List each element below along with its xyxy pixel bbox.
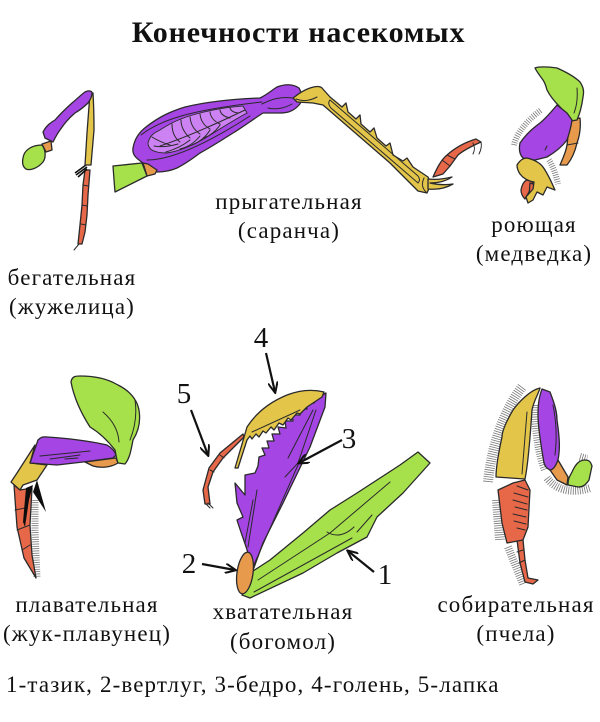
burrowing leg: coxa <box>535 67 584 121</box>
collecting leg: tibia red segment <box>498 480 530 543</box>
label: burrowing: (медведка) <box>476 241 592 266</box>
swimming leg: hairs <box>35 500 37 578</box>
label: running: (жужелица) <box>9 294 135 319</box>
label: swimming: плавательная <box>15 592 159 617</box>
label: burrowing: роющая <box>491 212 577 237</box>
collecting leg: tarsus <box>517 540 538 584</box>
collecting leg: yellow tibia <box>496 388 540 479</box>
running leg illustration <box>23 91 94 250</box>
swimming leg: femur <box>30 437 116 465</box>
burrowing leg illustration <box>514 67 584 203</box>
collecting leg: femur <box>538 389 559 470</box>
number 3: 3 <box>342 423 356 455</box>
arrow 2 <box>202 564 235 570</box>
jumping leg: claws <box>428 177 453 189</box>
grasping leg illustration <box>203 390 430 598</box>
label: collecting: собирательная <box>437 592 595 617</box>
collecting leg: trochanter <box>550 460 568 485</box>
running leg: trochanter <box>42 141 52 152</box>
jumping leg: tarsus <box>433 139 481 177</box>
number 1: 1 <box>378 559 392 591</box>
number 4: 4 <box>254 322 269 354</box>
jumping leg: trochanter <box>143 163 157 176</box>
collecting leg: hairs <box>488 387 546 540</box>
running leg: coxa <box>23 145 45 170</box>
labels <box>3 189 595 654</box>
burrowing leg: hairs <box>514 110 558 184</box>
grasping leg: tarsus <box>203 434 244 504</box>
grasping leg: femur <box>235 393 326 573</box>
number 5: 5 <box>177 378 191 410</box>
label: running: бегательная <box>8 265 136 290</box>
grasping leg: tibia <box>235 390 324 468</box>
label: jumping: (саранча) <box>238 218 340 243</box>
swimming leg: spurs <box>23 480 46 527</box>
burrowing leg: claws <box>521 180 533 199</box>
arrow 4 <box>266 353 275 392</box>
swimming leg illustration <box>11 376 140 578</box>
grasping leg: trochanter <box>234 551 256 595</box>
running leg: tibia <box>85 93 94 165</box>
arrow 5 <box>191 410 208 455</box>
arrow 3 <box>299 440 342 463</box>
burrowing leg: tibia <box>560 118 580 165</box>
swimming leg: tarsus <box>14 485 36 578</box>
jumping leg: coxa <box>113 163 147 192</box>
jumping leg: femur pattern <box>148 106 247 153</box>
jumping leg: femur <box>133 85 302 172</box>
label: jumping: прыгательная <box>215 189 363 214</box>
number 2: 2 <box>182 548 196 580</box>
grasping leg: coxa <box>242 452 430 598</box>
burrowing leg: tarsus <box>517 158 555 203</box>
running leg: spurs <box>75 165 87 177</box>
collecting leg: coxa <box>568 460 592 487</box>
label: grasping: хватательная <box>213 599 353 624</box>
jumping leg illustration <box>113 85 481 193</box>
burrowing leg: femur <box>519 105 572 160</box>
legend: 1-тазик, 2-вертлуг, 3-бедро, 4-голень, 5-лапка <box>6 672 500 697</box>
swimming leg: orange trochanter <box>85 458 118 467</box>
label: collecting: (пчела) <box>476 621 556 646</box>
arrow 1 <box>348 551 374 572</box>
swimming leg: tibia <box>11 445 47 490</box>
swimming leg: coxa <box>71 376 140 464</box>
label: swimming: (жук-плавунец) <box>3 621 171 646</box>
running leg: tarsus <box>78 170 90 244</box>
collecting leg illustration <box>488 387 592 584</box>
running leg: femur <box>43 91 92 142</box>
title: Конечности насекомых <box>132 16 465 49</box>
jumping leg: tibia <box>293 86 431 193</box>
label: grasping: (богомол) <box>230 629 336 654</box>
